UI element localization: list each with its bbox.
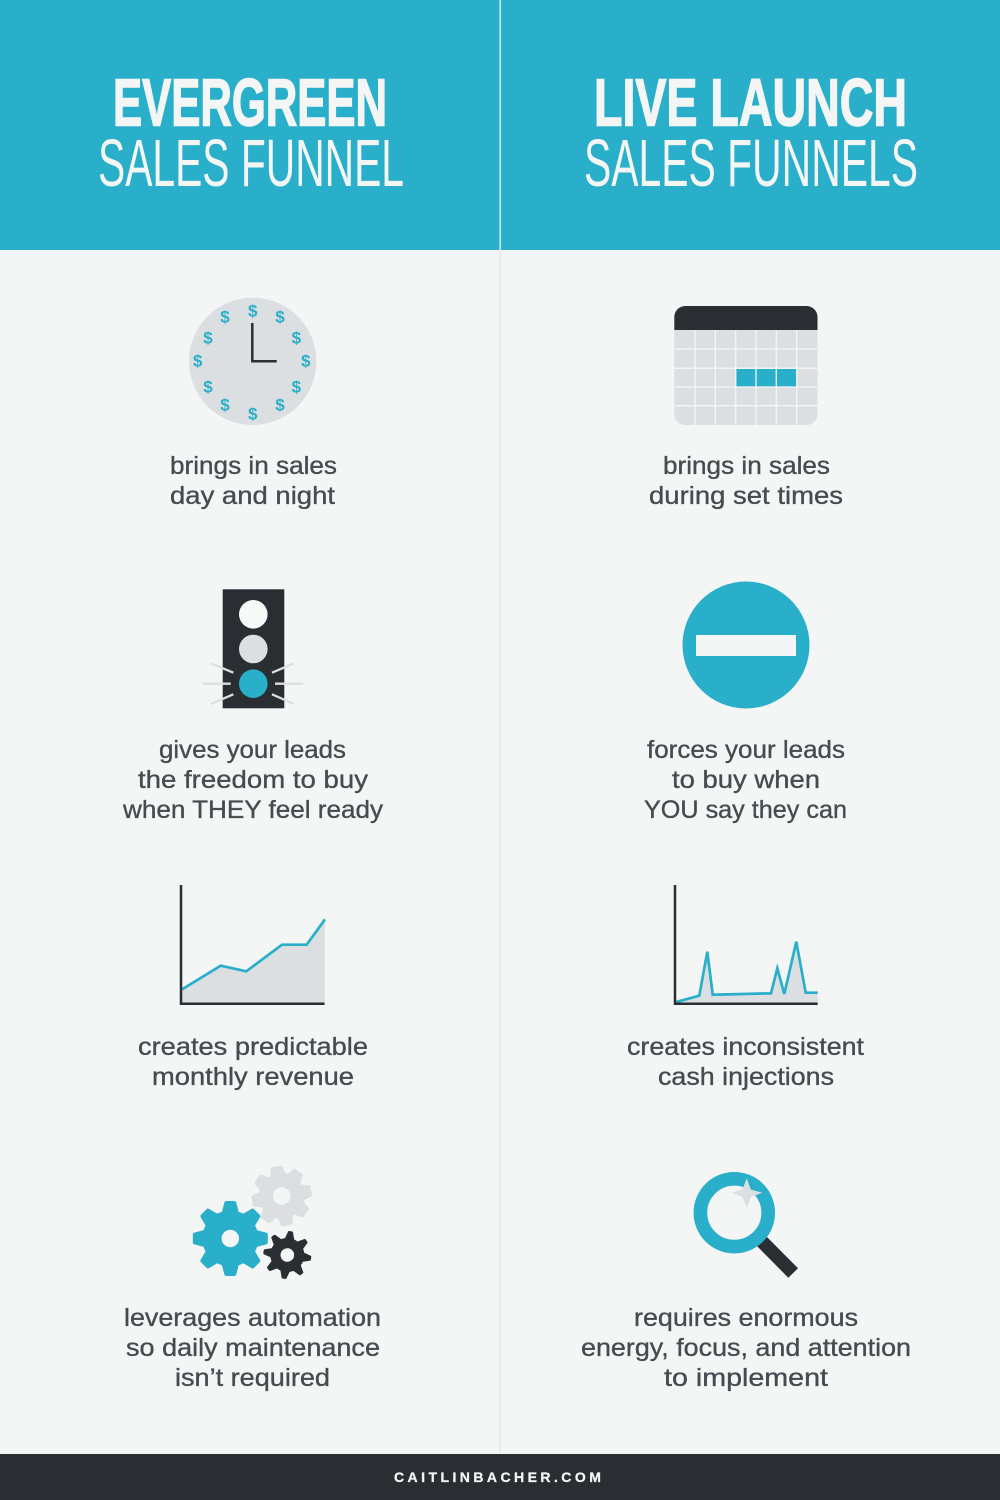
icon: grey gear — [249, 1164, 314, 1228]
text: brings in sales day and night: day and night — [170, 482, 335, 510]
icon: blue gear — [195, 1203, 266, 1274]
text: brings in sales during set times: during set times — [649, 482, 843, 510]
text: brings in sales during set times — [649, 452, 843, 510]
heading: evergreen sales funnel: EVERGREEN — [113, 66, 387, 140]
text: requires enormous: energy, focus, and attention — [581, 1334, 911, 1362]
icon: clock with dollar signs: $ — [248, 302, 258, 321]
icon: traffic light — [202, 589, 303, 708]
icon: dark gear — [261, 1229, 313, 1281]
text: gives your leads: when THEY feel ready — [122, 796, 384, 824]
icon: clock with dollar signs: $ — [292, 328, 302, 347]
text: creates inconsistent cash injections — [627, 1033, 864, 1091]
text: forces your leads: to buy when — [672, 766, 820, 794]
text: brings in sales day and night — [170, 452, 337, 510]
text: gives your leads — [122, 736, 384, 824]
icon: clock with dollar signs: $ — [292, 378, 302, 397]
text: creates inconsistent cash injections: cash injections — [658, 1063, 834, 1091]
text: requires enormous: to implement — [664, 1364, 828, 1392]
icon: gears — [195, 1164, 314, 1281]
icon: clock with dollar signs: $ — [193, 352, 203, 371]
text: leverages automation: leverages automation — [124, 1304, 381, 1332]
icon: clock with dollar signs: $ — [275, 308, 285, 327]
text: creates predictable monthly revenue — [138, 1033, 368, 1091]
footer bar — [0, 1454, 1000, 1500]
icon: clock with dollar signs: $ — [220, 308, 230, 327]
chart: predictable revenue — [181, 885, 325, 1004]
text: requires enormous — [581, 1304, 911, 1392]
heading: evergreen sales funnel — [98, 66, 404, 201]
text: creates inconsistent cash injections: creates inconsistent — [627, 1033, 864, 1061]
text: gives your leads: gives your leads — [159, 736, 346, 764]
footer text: CAITLINBACHER.COM — [394, 1469, 604, 1485]
text: forces your leads: YOU say they can — [644, 796, 847, 824]
text: forces your leads: forces your leads — [647, 736, 845, 764]
icon: magnifying glass — [700, 1178, 798, 1278]
icon: calendar — [674, 306, 818, 425]
panel: header evergreen — [0, 0, 500, 250]
icon: no entry sign — [682, 582, 810, 708]
text: creates predictable monthly revenue: creates predictable — [138, 1033, 368, 1061]
text: brings in sales during set times: brings in sales — [663, 452, 830, 480]
icon: clock with dollar signs: $ — [248, 404, 258, 423]
icon: clock with dollar signs — [189, 298, 316, 425]
text: requires enormous: requires enormous — [634, 1304, 858, 1332]
text: leverages automation — [124, 1304, 381, 1392]
text: forces your leads — [644, 736, 847, 824]
panel: header live launch — [501, 0, 1000, 250]
icon: clock with dollar signs: $ — [275, 395, 285, 414]
text: creates predictable monthly revenue: monthly revenue — [152, 1063, 354, 1091]
text: gives your leads: the freedom to buy — [138, 766, 369, 794]
heading: evergreen sales funnel: SALES FUNNEL — [98, 127, 404, 201]
icon: clock with dollar signs: $ — [301, 352, 311, 371]
icon: clock with dollar signs: $ — [203, 378, 213, 397]
icon: clock with dollar signs: $ — [220, 395, 230, 414]
text: leverages automation: isn’t required — [175, 1364, 330, 1392]
text: brings in sales day and night: brings in sales — [170, 452, 337, 480]
text: leverages automation: so daily maintenance — [126, 1334, 380, 1362]
heading: live launch sales funnels — [584, 66, 918, 201]
icon: clock with dollar signs: $ — [203, 328, 213, 347]
chart: inconsistent revenue — [675, 885, 818, 1004]
